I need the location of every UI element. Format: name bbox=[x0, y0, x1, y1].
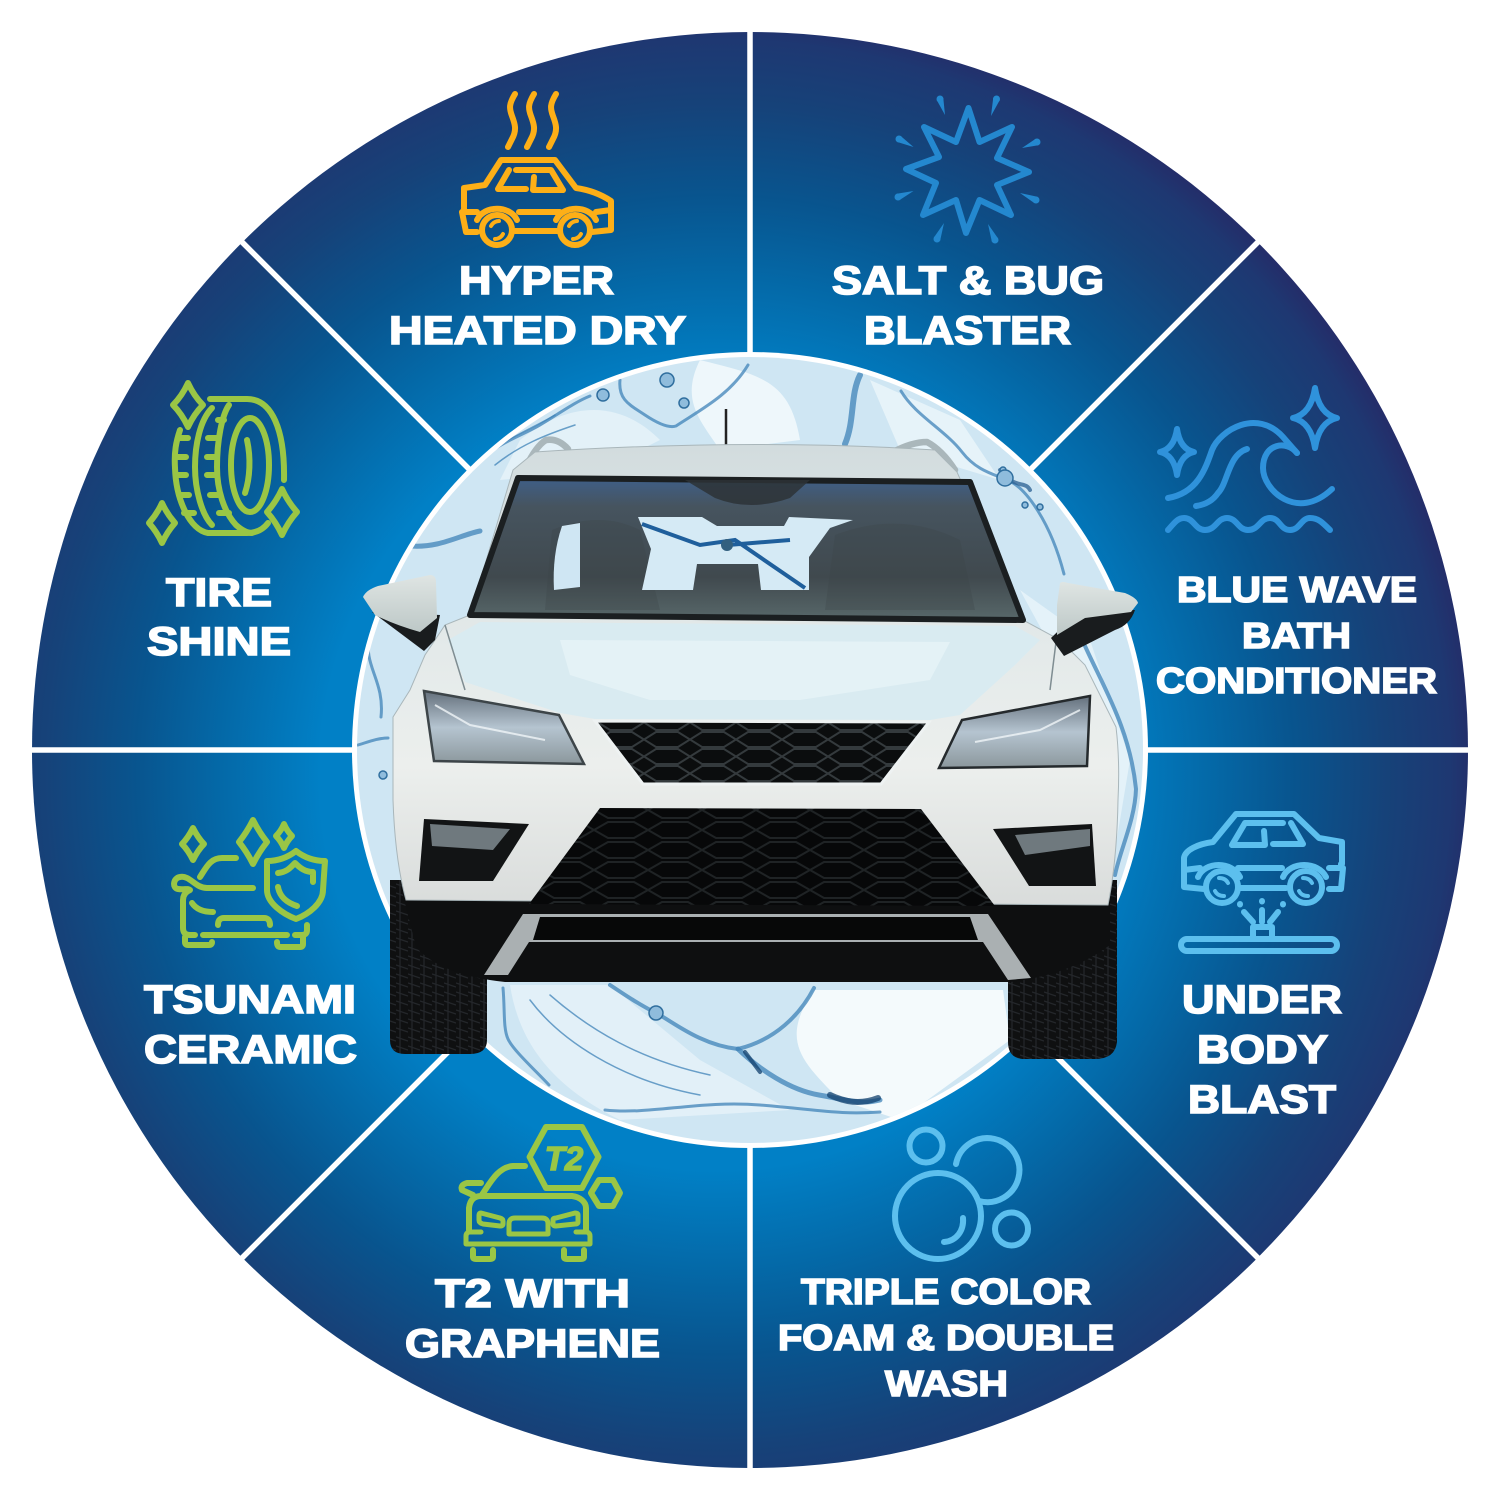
tires bbox=[390, 880, 1117, 1059]
icon: starburst bbox=[894, 96, 1040, 244]
heading: triple color foam and double wash bbox=[778, 1271, 1114, 1404]
heading: tire shine: TIRE bbox=[166, 571, 272, 615]
heading: salt and bug blaster: BLASTER bbox=[864, 309, 1071, 353]
heading: triple color foam and double wash: FOAM & DOUBLE bbox=[778, 1317, 1114, 1358]
heading: under body blast: BODY bbox=[1197, 1028, 1328, 1072]
interior seats and rear mirror bbox=[545, 480, 975, 610]
roof rails bbox=[526, 440, 955, 470]
heading: blue wave bath conditioner bbox=[1156, 569, 1437, 701]
panel: salt and bug blaster bbox=[832, 96, 1104, 353]
heading: tsunami ceramic: TSUNAMI bbox=[144, 978, 356, 1022]
heading: salt and bug blaster bbox=[832, 259, 1104, 353]
windshield bbox=[470, 478, 1023, 620]
heading: triple color foam and double wash: WASH bbox=[885, 1363, 1008, 1404]
heading: hyper heated dry bbox=[389, 259, 686, 353]
heading: hyper heated dry: HYPER bbox=[459, 259, 614, 303]
right headlight bbox=[939, 696, 1090, 768]
antenna bbox=[725, 409, 727, 446]
icon: car with t2 hexagon bbox=[462, 1127, 620, 1259]
heading: tire shine bbox=[147, 571, 291, 664]
right fog lamp bbox=[993, 824, 1096, 886]
left mirror bbox=[363, 575, 440, 651]
icon: car over spray nozzle bbox=[1181, 814, 1343, 951]
icon label: T2: T2 bbox=[545, 1140, 584, 1177]
car body bbox=[393, 444, 1119, 905]
heading: under body blast: BLAST bbox=[1188, 1078, 1336, 1122]
icon: tire with sparkles bbox=[149, 383, 297, 543]
hood highlight bbox=[448, 622, 1040, 720]
heading: t2 with graphene bbox=[405, 1272, 660, 1366]
heading: triple color foam and double wash: TRIPLE COLOR bbox=[801, 1271, 1091, 1312]
icon: heated car bbox=[462, 94, 611, 245]
icon: car with shield bbox=[174, 820, 325, 947]
heading: under body blast: UNDER bbox=[1182, 978, 1342, 1022]
upper grille bbox=[595, 721, 929, 784]
panel: under body blast bbox=[1181, 814, 1343, 1122]
panel: blue wave bath conditioner bbox=[1156, 388, 1437, 701]
car bbox=[363, 409, 1138, 1059]
skid plate bbox=[484, 914, 1031, 980]
heading: t2 with graphene: GRAPHENE bbox=[405, 1322, 660, 1366]
heading: tsunami ceramic: CERAMIC bbox=[144, 1028, 357, 1072]
heading: under body blast bbox=[1182, 978, 1342, 1122]
heading: tire shine: SHINE bbox=[147, 620, 291, 664]
center disc: water splash bbox=[352, 352, 1148, 1148]
lower bumper bbox=[403, 895, 1110, 982]
icon: wave with sparkles bbox=[1160, 388, 1337, 530]
right mirror bbox=[1051, 582, 1138, 656]
heading: salt and bug blaster: SALT & BUG bbox=[832, 259, 1104, 303]
left headlight bbox=[424, 691, 584, 764]
panel: triple color foam and double wash bbox=[778, 1130, 1114, 1404]
headlight details bbox=[435, 705, 1080, 742]
panel: t2 with graphene bbox=[405, 1127, 660, 1366]
panel: tire shine bbox=[147, 383, 297, 664]
heading: hyper heated dry: HEATED DRY bbox=[389, 309, 686, 353]
panel: tsunami ceramic bbox=[144, 820, 357, 1072]
lower grille bbox=[529, 808, 995, 906]
heading: blue wave bath conditioner: BLUE WAVE bbox=[1177, 569, 1417, 610]
left fog lamp bbox=[419, 819, 529, 881]
heading: blue wave bath conditioner: BATH bbox=[1242, 615, 1351, 656]
panel: hyper heated dry bbox=[389, 94, 686, 353]
heading: t2 with graphene: T2 WITH bbox=[435, 1272, 630, 1316]
heading: blue wave bath conditioner: CONDITIONER bbox=[1156, 660, 1437, 701]
icon: bubbles bbox=[895, 1130, 1028, 1259]
heading: tsunami ceramic bbox=[144, 978, 357, 1072]
see-through water in windshield bbox=[554, 517, 853, 590]
